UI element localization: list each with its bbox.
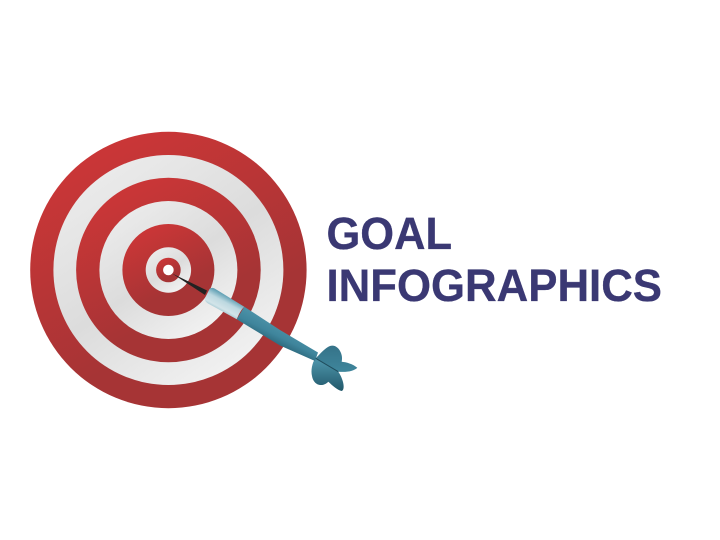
icon: dart bbox=[172, 273, 357, 391]
title: GOAL bbox=[326, 208, 452, 259]
dart needle bbox=[172, 273, 207, 295]
title bbox=[326, 208, 662, 311]
dart flights bbox=[311, 346, 357, 391]
target board bbox=[30, 132, 307, 408]
dart barrel bbox=[205, 288, 244, 319]
dart shaft bbox=[237, 307, 318, 361]
title: INFOGRAPHICS bbox=[326, 260, 662, 311]
dart flight seam bbox=[316, 358, 338, 372]
